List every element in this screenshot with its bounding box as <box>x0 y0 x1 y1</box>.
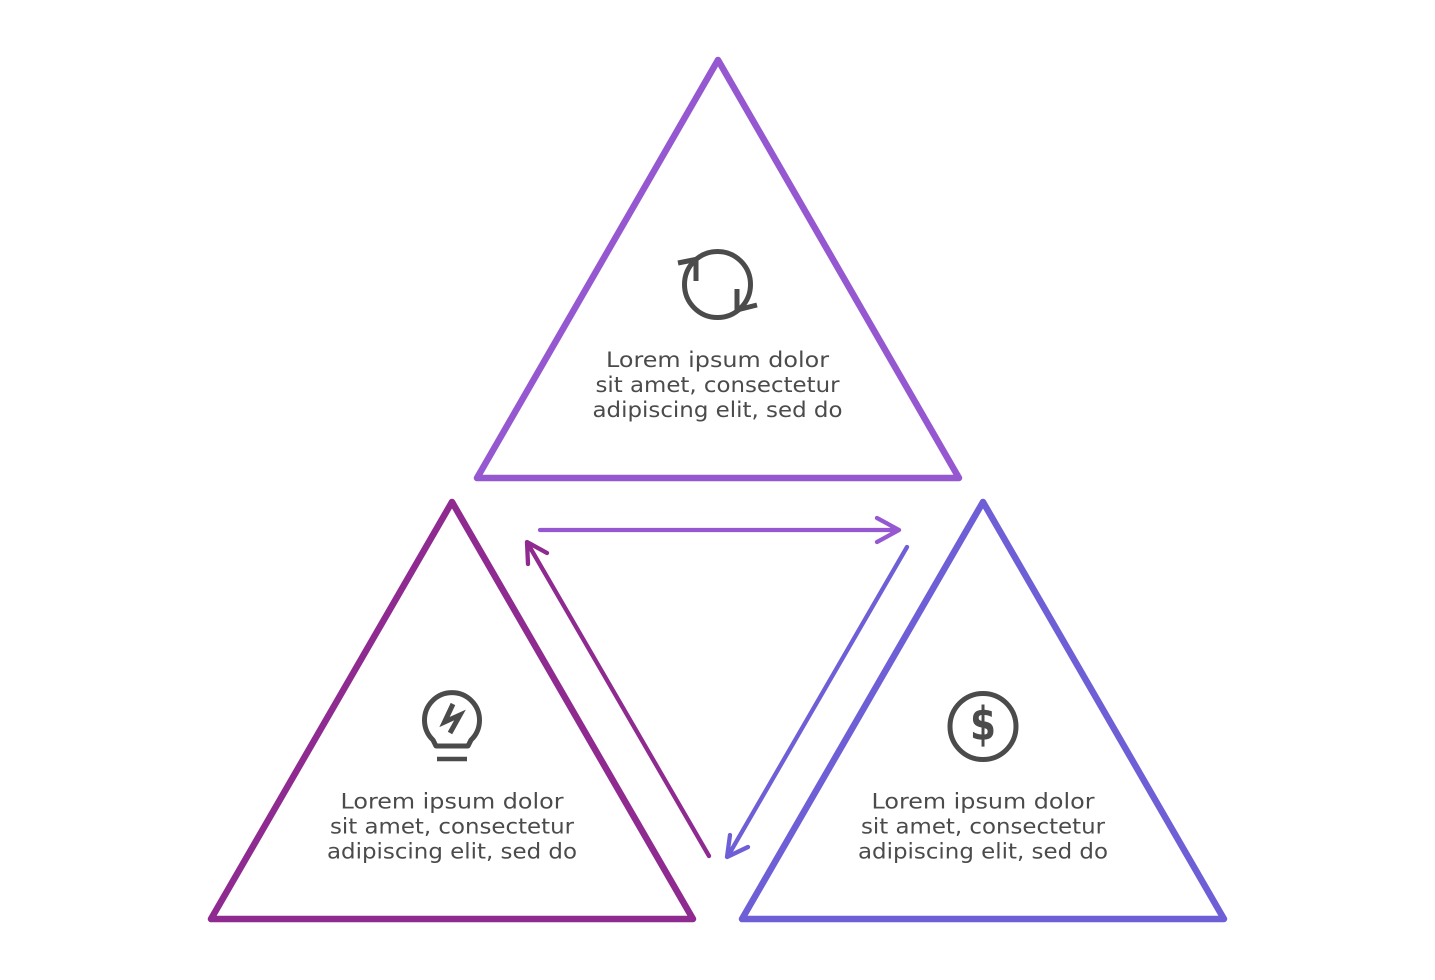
text block: right triangle: sit amet, consectetur <box>861 814 1105 838</box>
text block: left triangle <box>327 790 577 864</box>
text block: right triangle <box>858 790 1108 864</box>
arrow: top triangle to right triangle <box>540 518 899 542</box>
icon: dollar coin <box>950 694 1016 760</box>
arrow: left triangle to top triangle <box>527 542 709 856</box>
text block: right triangle: adipiscing elit, sed do <box>858 840 1108 864</box>
text block: top triangle: sit amet, consectetur <box>596 373 840 397</box>
triangle outline: right <box>742 502 1224 919</box>
triangle outline: top <box>477 60 959 478</box>
text block: top triangle: adipiscing elit, sed do <box>592 398 842 422</box>
text block: top triangle: Lorem ipsum dolor <box>606 348 829 372</box>
triangle outline: left <box>211 502 693 919</box>
text block: left triangle: Lorem ipsum dolor <box>340 790 564 814</box>
panel: top triangle <box>477 60 959 478</box>
icon: light bulb with bolt <box>424 693 480 759</box>
panel: right triangle <box>742 502 1224 919</box>
icon: refresh cycle <box>678 252 757 318</box>
text block: top triangle <box>592 348 842 422</box>
text block: right triangle: Lorem ipsum dolor <box>872 790 1095 814</box>
text block: left triangle: sit amet, consectetur <box>330 814 574 838</box>
panel: left triangle <box>211 502 693 919</box>
text block: left triangle: adipiscing elit, sed do <box>327 840 577 864</box>
icon: dollar coin: $ <box>970 697 996 751</box>
arrow: right triangle to left triangle <box>727 547 907 857</box>
